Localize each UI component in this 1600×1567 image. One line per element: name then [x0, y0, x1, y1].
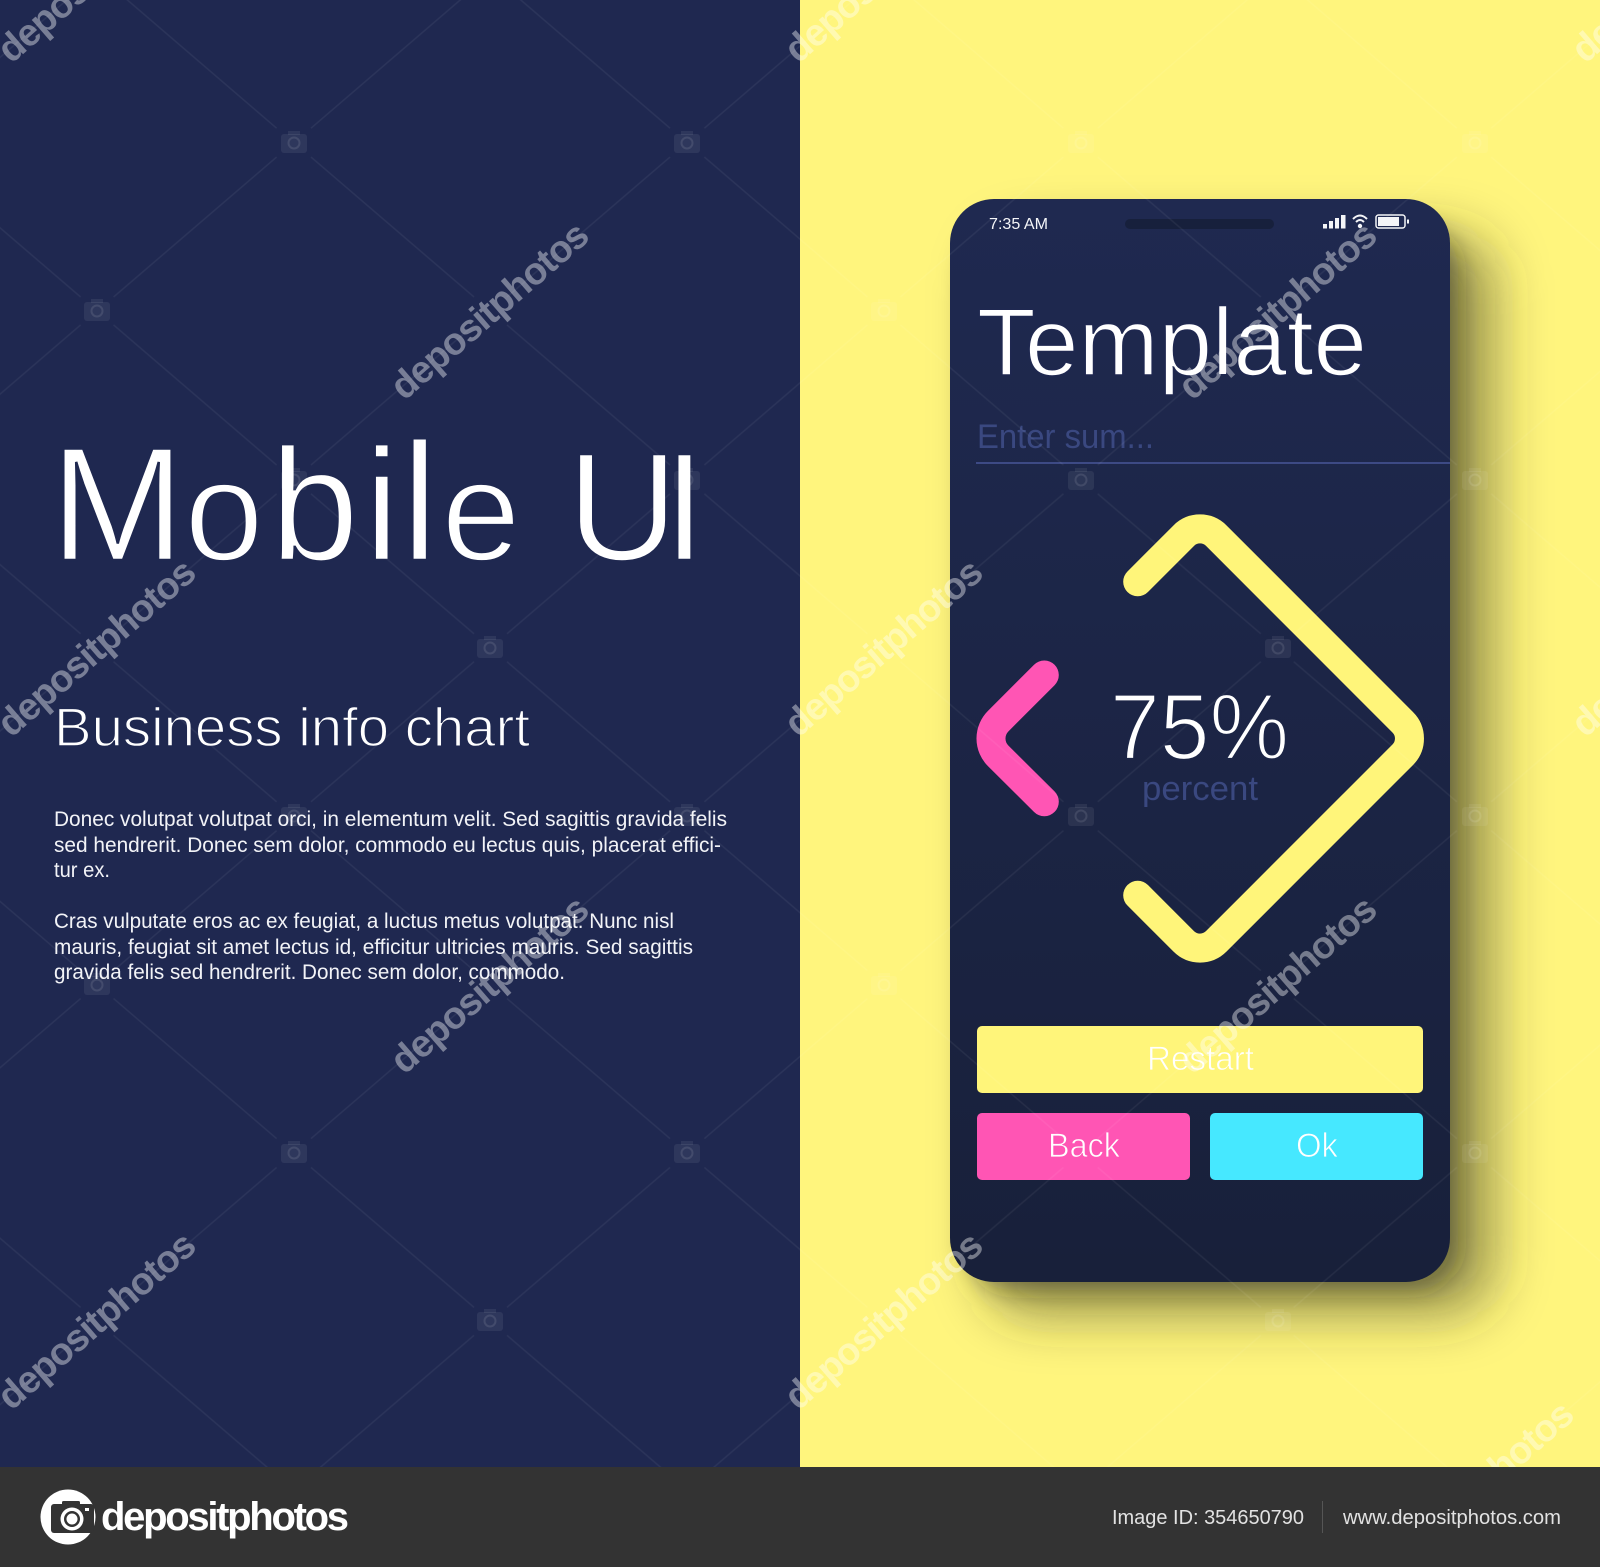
chart value: 75%: 75% — [1110, 674, 1289, 779]
watermark wordmarks: depositphotos — [383, 888, 597, 1082]
title: Mobile UI: U — [567, 421, 678, 593]
phone notch speaker — [1125, 219, 1274, 229]
watermark wordmarks: depositphotos — [777, 1224, 991, 1418]
button: Ok: Ok — [1296, 1127, 1339, 1165]
text block: body paragraphs: Donec volutpat volutpat orci, in elementum velit. Sed sagittis gravida felis — [54, 808, 727, 831]
watermark wordmarks: depositphotos — [1171, 214, 1385, 408]
text block: body paragraphs: gravida felis sed hendrerit. Donec sem dolor, commodo. — [54, 961, 565, 984]
subtitle: Business info chart: Business info chart — [54, 696, 530, 758]
watermark wordmarks: depositphotos — [383, 214, 597, 408]
phone body — [950, 199, 1450, 1282]
watermark wordmarks: depositphotos — [777, 551, 991, 745]
text block: body paragraphs: Cras vulputate eros ac ex feugiat, a luctus metus volutpat. Nunc nisl — [54, 910, 674, 933]
phone mockup — [950, 199, 1450, 1282]
icon: depositphotos logo — [40, 1490, 96, 1544]
button: Back — [977, 1113, 1190, 1180]
title: Mobile UI: M — [50, 414, 185, 595]
heading: Template: Template — [977, 289, 1367, 396]
website url: www.depositphotos.com — [1342, 1507, 1561, 1529]
button: Ok — [1210, 1113, 1423, 1180]
icon: battery — [1376, 215, 1409, 228]
chart: yellow 75 percent diamond arc — [1138, 529, 1409, 948]
phone drop shadow — [968, 225, 1495, 1315]
image id: Image ID: 354650790 — [1112, 1507, 1304, 1529]
title: Mobile UI: e — [442, 432, 560, 591]
title: Mobile UI: b — [270, 415, 359, 594]
panel: navy left background — [0, 0, 800, 1467]
title: Mobile UI: o — [184, 432, 263, 591]
button: Restart — [977, 1026, 1423, 1093]
icon: signal bars — [1323, 215, 1346, 228]
text block: body paragraphs: tur ex. — [54, 859, 110, 882]
title: Mobile UI — [50, 408, 706, 596]
input placeholder: Enter sum: Enter sum... — [977, 418, 1154, 456]
footer wordmark: depositphotos — [101, 1495, 349, 1539]
title: Mobile UI: l — [401, 408, 438, 596]
text block: body paragraphs — [54, 808, 727, 984]
button: Back: Back — [1048, 1127, 1121, 1165]
icon: wifi — [1353, 216, 1367, 227]
footer bar — [0, 1467, 1600, 1567]
chart label: percent: percent — [1142, 770, 1259, 808]
title: Mobile UI: I — [663, 421, 706, 593]
chart: pink remainder arc — [991, 675, 1044, 802]
title: Mobile UI: i — [364, 415, 400, 594]
input underline — [976, 462, 1450, 464]
button: Restart: Restart — [1147, 1040, 1255, 1078]
watermark wordmarks: depositphotos — [1171, 888, 1385, 1082]
watermark camera icons — [84, 131, 1488, 1331]
panel: yellow right background — [800, 0, 1600, 1467]
text block: body paragraphs: sed hendrerit. Donec sem dolor, commodo eu lectus quis, placerat effici- — [54, 834, 721, 857]
status bar time: 7:35 AM — [989, 216, 1048, 233]
text block: body paragraphs: mauris, feugiat sit amet lectus id, efficitur ultricies mauris. Sed sagittis — [54, 936, 693, 959]
